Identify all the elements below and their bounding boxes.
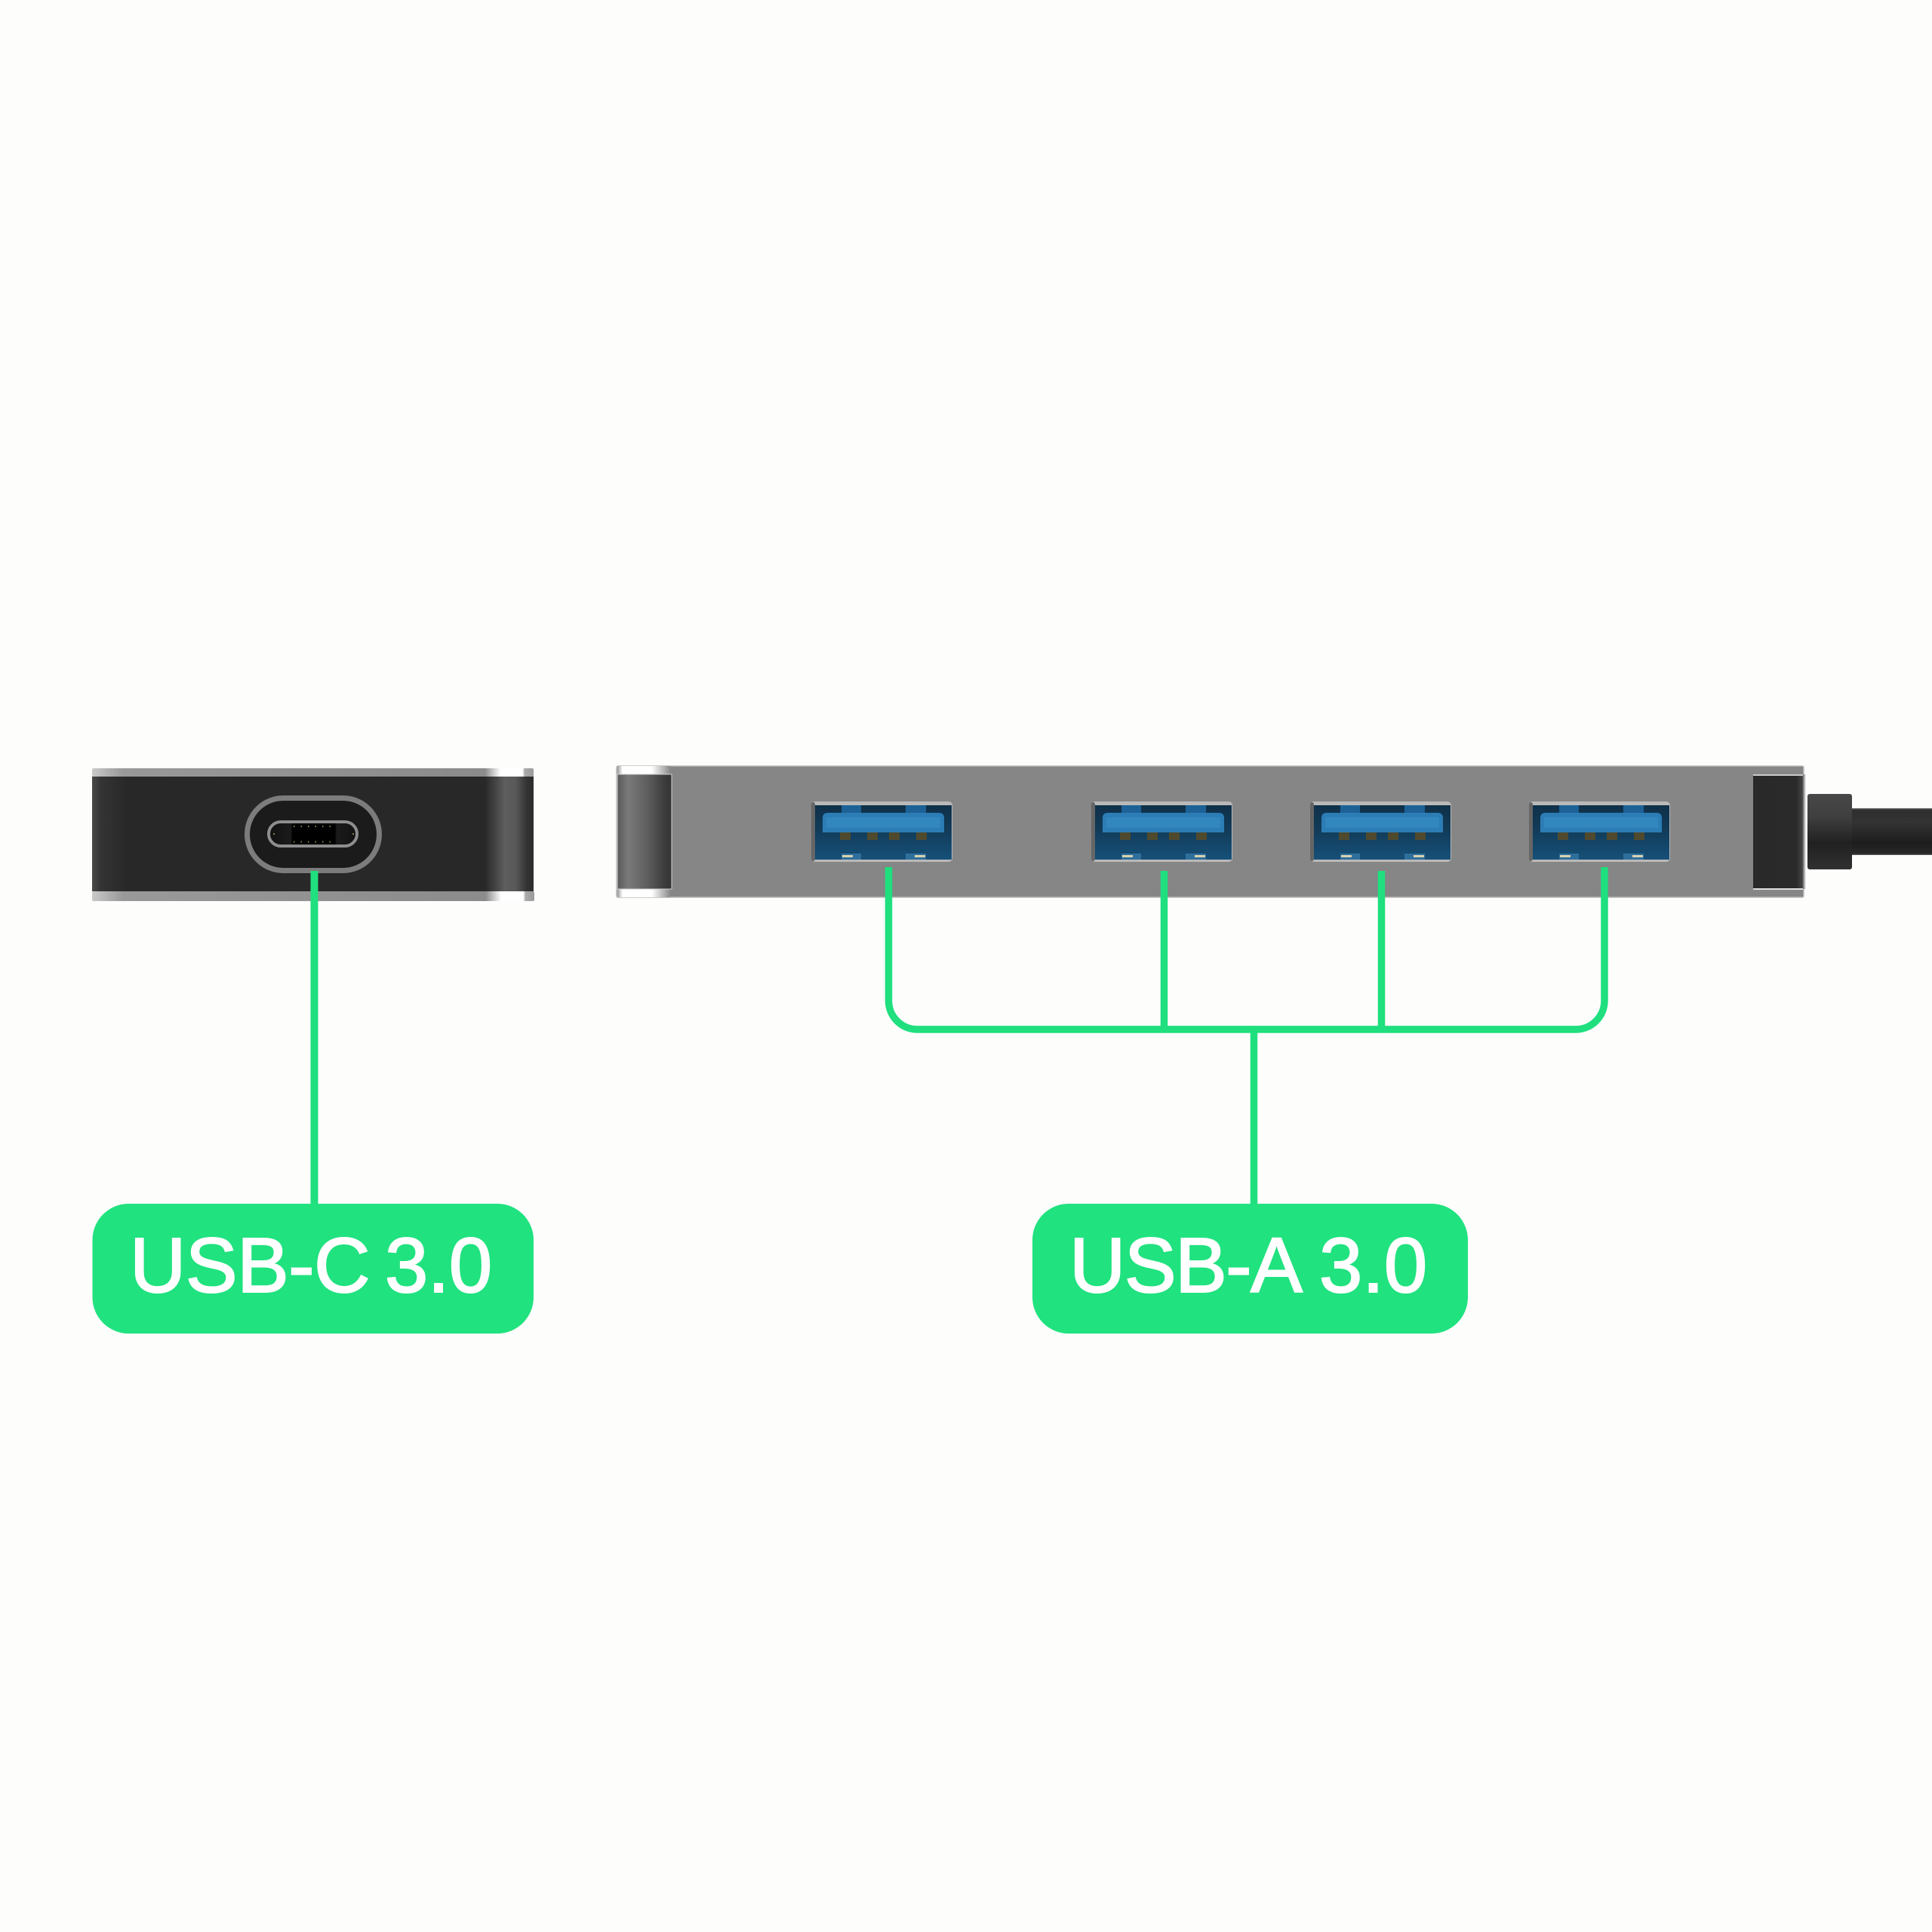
left end cap [617, 774, 672, 889]
connector: USB-C line to label [311, 871, 318, 1204]
right end cap [1753, 774, 1806, 889]
device: USB hub side view with four USB-A ports [617, 766, 1806, 897]
hub body [617, 766, 1804, 897]
right end cap bottom edge [1753, 888, 1803, 890]
dark body [92, 777, 534, 891]
label: USB-A 3.0 [1032, 1204, 1468, 1334]
label: USB-C 3.0 [92, 1204, 534, 1334]
USB-C port bezel [248, 798, 379, 871]
cable strain relief [1807, 794, 1852, 869]
USB-A port 2 [1091, 801, 1232, 862]
USB-A port 1 [811, 801, 952, 862]
left end bottom highlight [617, 889, 670, 897]
cable [1807, 794, 1932, 869]
right end cap top edge [1753, 774, 1803, 776]
bottom metal rail [92, 891, 534, 901]
USB-A port 3 [1310, 801, 1451, 862]
top metal rail [92, 768, 534, 777]
USB-C port opening [269, 822, 357, 846]
left end top highlight [617, 766, 670, 774]
device: USB-C end view [92, 768, 534, 901]
USB-A port 4 [1529, 801, 1670, 862]
label: USB-C 3.0: 3.0 [385, 1222, 492, 1309]
cable cord [1849, 808, 1932, 855]
label: USB-A 3.0: 3.0 [1319, 1222, 1427, 1309]
label: USB-A 3.0: USB-A [1069, 1222, 1297, 1309]
label: USB-C 3.0: USB-C [130, 1222, 370, 1309]
connector: USB-A bracket lines to label [889, 867, 1604, 1204]
